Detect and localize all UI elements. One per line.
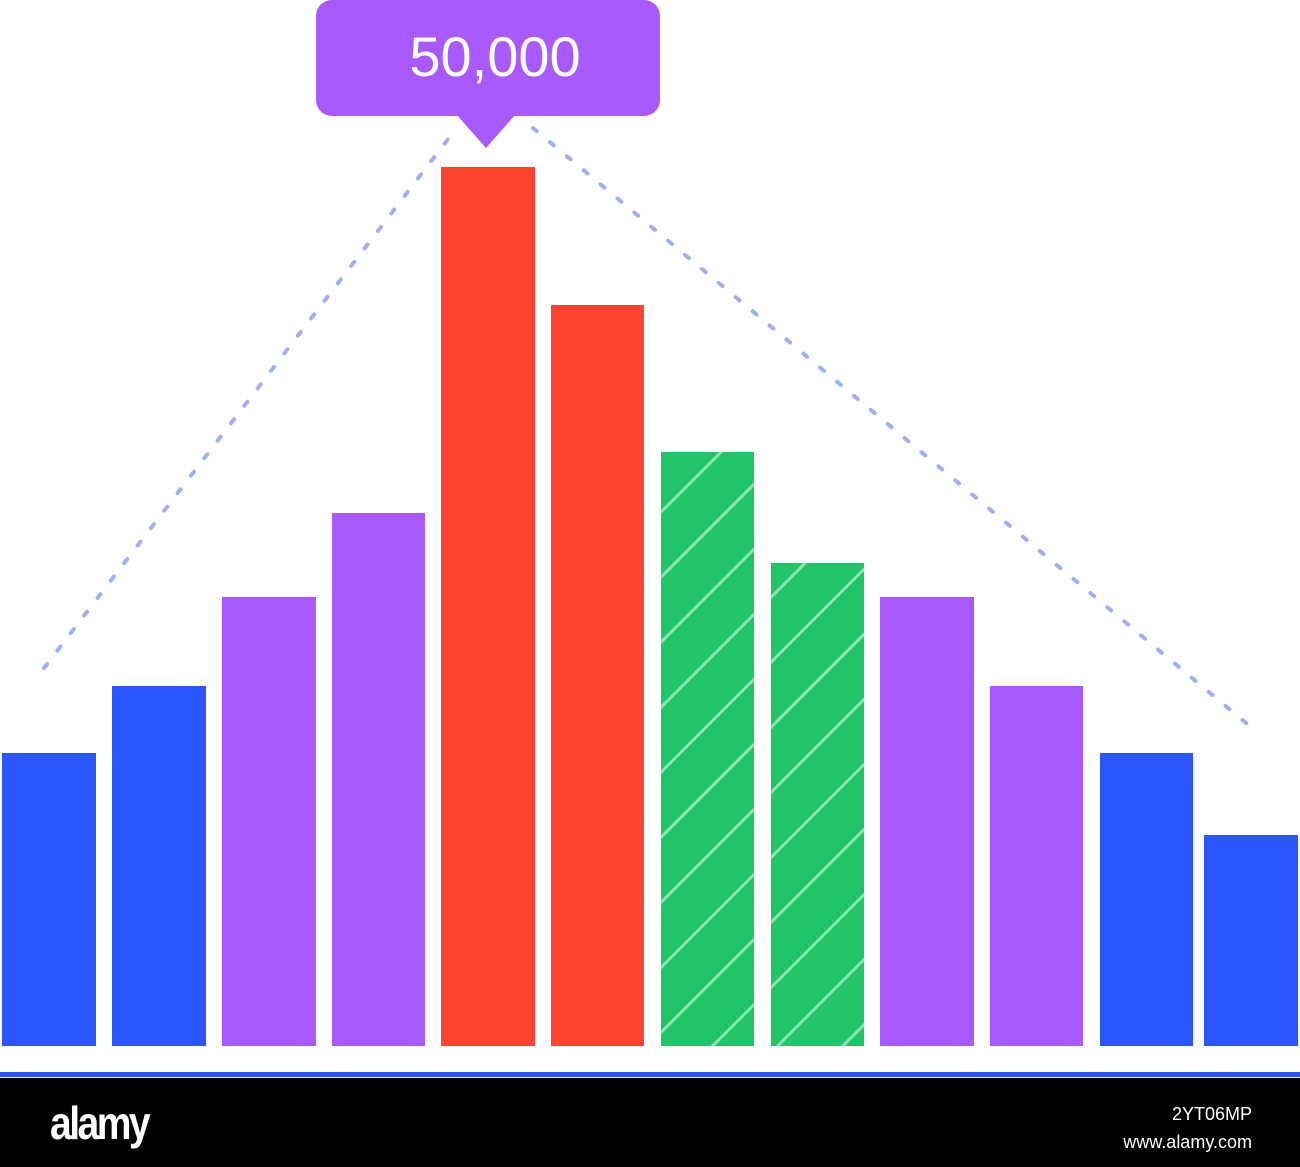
baseline (0, 1072, 1300, 1077)
footer id text: www.alamy.com (1123, 1132, 1252, 1152)
footer logo: alamy (50, 1097, 148, 1149)
footer (0, 1078, 1300, 1167)
trend line: dotted (44, 128, 1252, 728)
bars (2, 167, 1298, 1046)
callout: 50,000: 50,000 (409, 25, 581, 88)
callout: 50,000 (316, 0, 660, 148)
footer id text (1123, 1104, 1252, 1152)
footer id text: 2YT06MP (1172, 1104, 1252, 1124)
